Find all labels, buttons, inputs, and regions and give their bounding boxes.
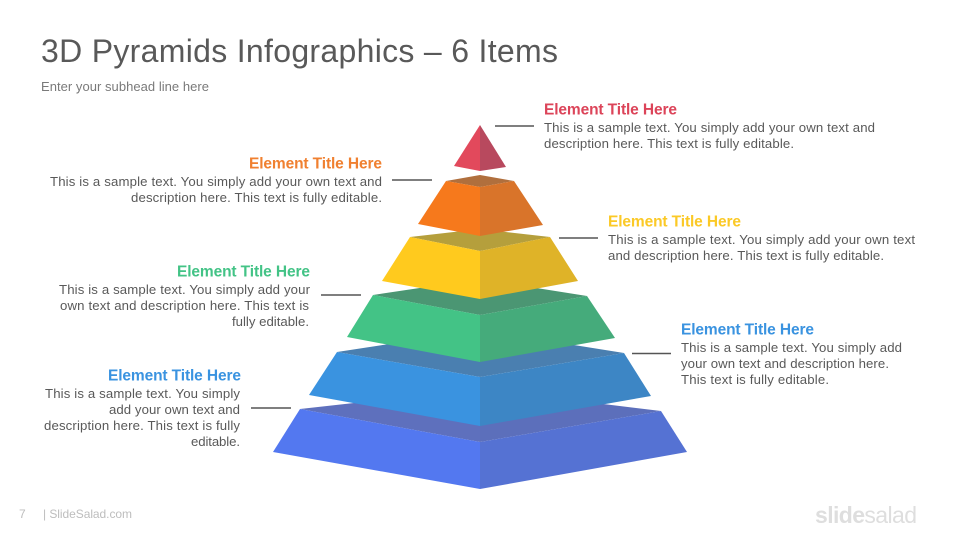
callout: yellow element: This is a sample text. You simply add your own text: [608, 232, 915, 247]
callout: green element: This is a sample text. You simply add your: [59, 282, 311, 297]
title: 3D Pyramids Infographics – 6 Items: [41, 33, 558, 69]
layer 3: yellow: [382, 229, 578, 299]
layer 2: orange: [418, 175, 543, 236]
logo: slidesalad: slidesalad: [815, 502, 917, 528]
callout: red element: This is a sample text. You simply add your own text and: [544, 120, 875, 135]
callout: blue element: This text is fully editable.: [681, 372, 829, 387]
pyramid: [273, 125, 687, 489]
callout: yellow element: [559, 214, 915, 263]
layer 4: green: [347, 279, 615, 362]
callout: indigo element: editable.: [191, 434, 240, 449]
callout: yellow element: and description here. This text is fully editable.: [608, 248, 884, 263]
callout: orange element: description here. This text is fully editable.: [131, 190, 382, 205]
callout: indigo element: [44, 368, 291, 449]
callout: red element: description here. This text is fully editable.: [544, 136, 794, 151]
callout: red element: Element Title Here: [544, 102, 677, 118]
footer: site name: | SlideSalad.com: [43, 507, 132, 521]
callout: blue element: This is a sample text. You simply add: [681, 340, 902, 355]
callout: green element: fully editable.: [232, 314, 309, 329]
callout: red element: [495, 102, 875, 151]
callout: orange element: [50, 156, 432, 205]
callout: blue element: Element Title Here: [681, 322, 814, 338]
callout: indigo element: add your own text and: [109, 402, 240, 417]
callout: orange element: Element Title Here: [249, 156, 382, 172]
callout: green element: own text and description here. This text is: [60, 298, 309, 313]
subhead: Enter your subhead line here: [41, 79, 209, 94]
callout: indigo element: Element Title Here: [108, 368, 241, 384]
callout: orange element: This is a sample text. You simply add your own text and: [50, 174, 382, 189]
callout: blue element: your own text and description here.: [681, 356, 889, 371]
callout: indigo element: This is a sample text. You simply: [45, 386, 240, 401]
callout: green element: [59, 264, 361, 329]
layer 5: blue: [309, 330, 651, 426]
callout: blue element: [632, 322, 902, 387]
callout: yellow element: Element Title Here: [608, 214, 741, 230]
layer 6: indigo: [273, 389, 687, 489]
callout: indigo element: description here. This text is fully: [44, 418, 240, 433]
callout: green element: Element Title Here: [177, 264, 310, 280]
footer: page number: 7: [19, 507, 26, 521]
layer 1: red tip: [454, 125, 506, 171]
